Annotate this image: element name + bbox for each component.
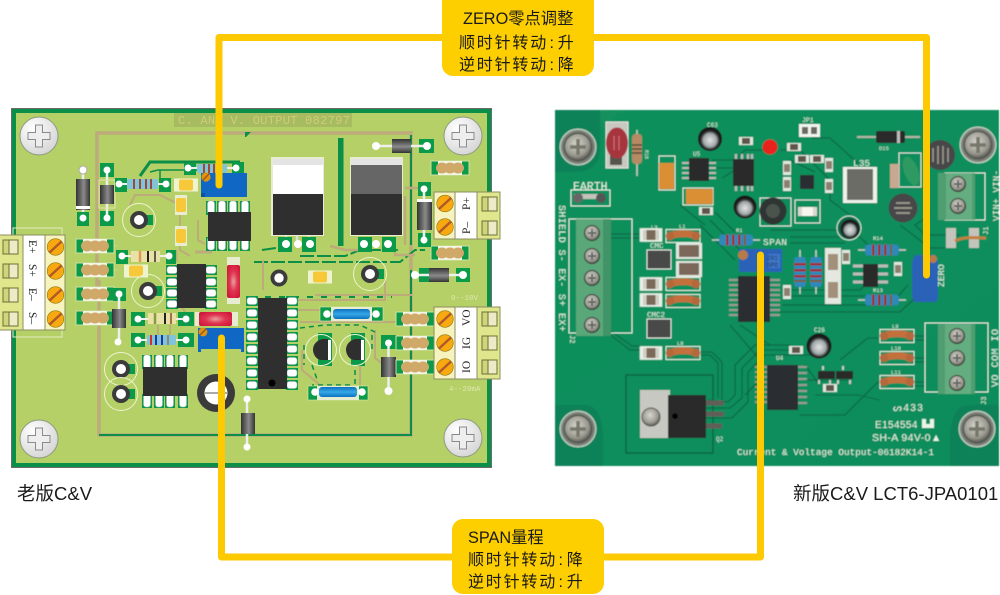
small SMD near C59	[699, 207, 713, 215]
connector line: SPAN callout to pots	[222, 255, 760, 557]
blue component lower	[308, 386, 368, 400]
silkscreen labels: L1	[679, 223, 686, 230]
board green border	[14, 111, 489, 465]
callout: ZERO: 逆时针转动:降	[459, 56, 576, 74]
SPAN trimmer: 201	[767, 255, 778, 262]
J2 terminal	[569, 219, 632, 336]
blue resistor colored bands	[131, 333, 194, 347]
terminal block left	[0, 228, 65, 337]
diode D15	[857, 131, 920, 152]
C40 capacitor	[795, 200, 820, 223]
diode horizontal right	[411, 268, 470, 282]
panel: old C&V board	[0, 108, 500, 468]
silkscreen labels: CMC	[650, 243, 664, 251]
callout: SPAN: 逆时针转动:升	[468, 573, 585, 591]
panel: new C&V board	[555, 110, 1000, 466]
caption: new board: 新版C&V LCT6-JPA0101	[793, 483, 998, 504]
terminal block right lower: IG	[461, 337, 473, 349]
connector line: ZERO callout to pots	[219, 38, 926, 275]
terminal block left: S+	[26, 264, 38, 277]
J1 terminal	[938, 173, 985, 220]
terminal block left: E+	[26, 240, 38, 254]
resistor R18: R18	[643, 150, 649, 159]
jumpers lower right	[396, 312, 434, 374]
silkscreen labels: R14	[873, 235, 884, 242]
SPAN trimmer: SPO	[767, 262, 778, 269]
diode D15: D15	[879, 145, 889, 152]
terminal block left: S–	[26, 312, 38, 324]
silkscreen labels: L3	[651, 224, 658, 231]
silkscreen labels: L8	[677, 340, 684, 347]
inductor L35	[843, 158, 877, 203]
electrolytic capacitor C26	[806, 334, 832, 358]
silkscreen labels: SHIELD S- EX- S+ EX+	[555, 205, 566, 332]
callout: SPAN: SPAN量程	[468, 529, 544, 547]
shielded coil	[760, 198, 791, 226]
blue trimmer pot (SPAN)	[198, 328, 244, 352]
mounting screws	[560, 127, 996, 447]
voltage and current silk labels: 0--10V	[451, 295, 479, 303]
blue trimmer pot (ZERO)	[201, 172, 247, 197]
small triangle marker	[245, 132, 251, 137]
JP1 header: JP1	[802, 117, 814, 124]
inductor L35: L35	[853, 158, 870, 169]
silkscreen labels: L9	[892, 323, 899, 330]
silkscreen labels: L11	[891, 369, 902, 376]
silkscreen labels: SH-A 94V-0▲	[872, 432, 942, 444]
small SMD row	[739, 137, 833, 193]
terminal block right lower: VO	[461, 309, 473, 326]
inductors L9 L10 L11	[880, 330, 914, 388]
terminal block right lower	[434, 307, 500, 379]
tantalum capacitors	[659, 156, 713, 205]
diode	[241, 396, 255, 450]
electrolytic capacitor C63	[698, 122, 722, 151]
darker corners	[555, 110, 999, 466]
terminal block right lower: IO	[461, 361, 473, 373]
thick green bar	[338, 138, 344, 246]
diode top right	[372, 139, 434, 153]
callout: ZERO: 顺时针转动:升	[459, 34, 576, 52]
electrolytic capacitor C63: C63	[707, 122, 718, 129]
silkscreen labels: L10	[891, 345, 901, 352]
copper traces	[608, 138, 960, 418]
diode	[76, 166, 90, 226]
Q2 outline	[626, 375, 713, 453]
J3 terminal	[925, 323, 988, 394]
silkscreen labels: R1	[736, 227, 743, 234]
resistor	[115, 178, 171, 192]
terminal block right upper: P–	[461, 222, 473, 234]
JP1 header	[799, 117, 820, 137]
silkscreen labels: SPAN	[763, 237, 787, 248]
Q2 regulator: Q2	[716, 436, 724, 443]
coil L13	[925, 140, 955, 170]
board base	[555, 110, 999, 466]
silkscreen labels: E154554	[875, 420, 918, 431]
IC U3 top	[733, 154, 754, 191]
through-hole vias	[104, 204, 386, 410]
silkscreen labels: C26	[814, 327, 825, 334]
silkscreen title: C. AND V. OUTPUT 082797	[178, 114, 350, 128]
IC U1	[206, 201, 251, 251]
U6 small IC	[800, 175, 814, 189]
Q2 regulator	[640, 390, 724, 443]
red component horizontal	[195, 312, 238, 326]
voltage and current silk labels	[449, 295, 481, 394]
electrolytic capacitor C28	[837, 216, 861, 240]
diode vertical right	[417, 182, 432, 247]
terminal block right upper	[434, 192, 500, 239]
small parts around U4	[789, 346, 853, 392]
U5 IC	[682, 151, 716, 181]
callout: SPAN	[452, 519, 604, 594]
diode	[99, 163, 115, 226]
terminal block right upper: P+	[461, 197, 473, 210]
main IC	[246, 296, 298, 390]
IC U3	[142, 355, 188, 408]
diode right lower	[381, 335, 396, 395]
transistors	[306, 333, 370, 366]
U4 IC	[755, 365, 807, 410]
silkscreen labels: J1	[983, 227, 991, 235]
silkscreen labels: R13	[873, 287, 883, 294]
SMD caps centre	[783, 248, 902, 304]
U1 IC	[853, 264, 888, 287]
inductors and SMDs left bank	[640, 228, 702, 360]
silkscreen labels: CMC2	[647, 312, 665, 320]
silkscreen labels	[555, 170, 1000, 458]
coil L12	[888, 194, 918, 222]
TO-220 transistor grey	[350, 157, 403, 252]
silkscreen labels: U4	[776, 355, 784, 362]
tan resistor lower	[131, 312, 194, 326]
silkscreen labels: EARTH	[573, 181, 608, 194]
silkscreen labels: J2	[567, 335, 575, 343]
voltage and current silk labels: 4--20mA	[449, 386, 481, 394]
callout: ZERO: ZERO零点调整	[463, 10, 573, 28]
green capacitor	[890, 153, 923, 188]
IC U2	[166, 264, 217, 309]
large capacitor	[197, 374, 235, 412]
jumpers left	[76, 239, 114, 325]
SPAN trimmer	[738, 249, 782, 272]
electrolytic capacitor	[734, 196, 756, 218]
SMD capacitors	[124, 178, 332, 284]
silkscreen labels: ᔕ433	[893, 403, 924, 414]
TO-220 transistor white	[271, 157, 324, 252]
terminal block left: E–	[26, 288, 38, 301]
mounting screws	[20, 117, 482, 458]
board base	[12, 108, 492, 468]
silkscreen labels: ZERO	[936, 264, 947, 287]
resistors and ICs centre	[712, 234, 906, 306]
silkscreen labels: J3	[981, 397, 989, 405]
red component vertical	[227, 257, 240, 304]
callout: ZERO	[442, 0, 594, 76]
central IC	[729, 276, 780, 322]
red LED	[762, 140, 778, 154]
U5 IC: U5	[693, 151, 701, 158]
tan resistor	[116, 250, 176, 264]
callout: SPAN: 顺时针转动:降	[468, 551, 585, 569]
fuse F1	[946, 228, 986, 248]
jumpers right upper	[431, 161, 469, 260]
resistor R18	[632, 130, 649, 176]
silkscreen labels: Current & Voltage Output-06182K14-1	[737, 447, 934, 458]
resistor	[184, 162, 244, 176]
CMC chokes	[647, 250, 671, 338]
caption: old board: 老版C&V	[17, 483, 93, 504]
diode	[112, 288, 126, 346]
red capacitor	[606, 122, 628, 168]
traces	[77, 133, 425, 435]
ZERO trimmer	[912, 255, 938, 302]
blue component upper	[320, 307, 383, 321]
EARTH jumper	[571, 190, 610, 206]
